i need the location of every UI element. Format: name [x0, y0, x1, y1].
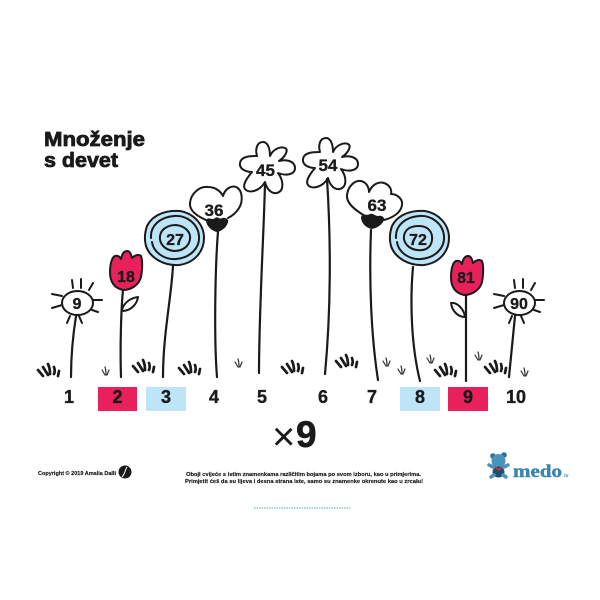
title: Množenje	[44, 129, 145, 151]
multiplier number row: 5	[257, 387, 267, 407]
multiplier number row: 1	[64, 387, 74, 407]
flower 1: sun 9	[52, 279, 102, 377]
multiplier number row: 4	[209, 387, 219, 407]
multiplier number row: 2	[112, 387, 123, 407]
title	[44, 129, 145, 172]
flower 3: blue rose 27: 27	[166, 232, 184, 249]
times nine heading: ×	[272, 415, 295, 459]
flower 5: daisy 45	[240, 142, 295, 373]
multiplier number row: 9	[463, 387, 473, 407]
times nine heading	[272, 414, 317, 459]
instructions	[185, 472, 423, 485]
multiplier number row: 3	[161, 387, 171, 407]
logo: medo: medo	[513, 461, 562, 481]
flower 10: sun 90: 90	[510, 296, 528, 313]
flower 9: red tulip 81: 81	[457, 270, 475, 287]
flower 4: heart flower 36: 36	[205, 201, 223, 220]
icon: teddy bear	[489, 452, 508, 478]
dotted line	[254, 507, 351, 509]
flower 6: daisy 54: 54	[319, 156, 338, 175]
copyright	[38, 466, 132, 478]
flower 6: daisy 54	[303, 138, 358, 374]
flower 7: heart flower 63	[347, 181, 402, 380]
flower 8: blue rose 72	[390, 211, 449, 381]
flower 2: red tulip 18: 18	[117, 269, 135, 286]
flower 9: red tulip 81	[451, 256, 483, 381]
flower 10: sun 90	[494, 279, 544, 377]
multiplier number row: 7	[367, 387, 377, 407]
instructions: Oboji cvijeće s istim znamenkama različitim bojama po svom izboru, kao u primjerima.	[186, 472, 421, 478]
flower 1: sun 9: 9	[73, 296, 82, 313]
flower 8: blue rose 72: 72	[409, 232, 427, 249]
logo: medo	[489, 452, 569, 481]
flower 5: daisy 45: 45	[256, 161, 275, 180]
multiplier number row: 10	[506, 387, 526, 407]
multiplier number row: 6	[318, 387, 328, 407]
flower 3: blue rose 27	[145, 211, 204, 377]
instructions: Primjetit ćeš da su lijeva i desna strana iste, samo su znamenke okrenute kao u zrcalu!	[185, 479, 423, 485]
logo: medo: .hr	[563, 473, 569, 478]
times nine heading: 9	[296, 414, 317, 455]
flower 4: heart flower 36	[190, 186, 242, 377]
flower 7: heart flower 63: 63	[368, 196, 386, 215]
flower 2: red tulip 18	[110, 251, 142, 377]
title: s devet	[44, 150, 118, 172]
multiplier number row	[64, 387, 526, 411]
grass tufts	[38, 352, 528, 376]
copyright: Copyright © 2019 Amalia Dalli	[38, 470, 116, 477]
multiplier number row: 8	[415, 387, 425, 407]
